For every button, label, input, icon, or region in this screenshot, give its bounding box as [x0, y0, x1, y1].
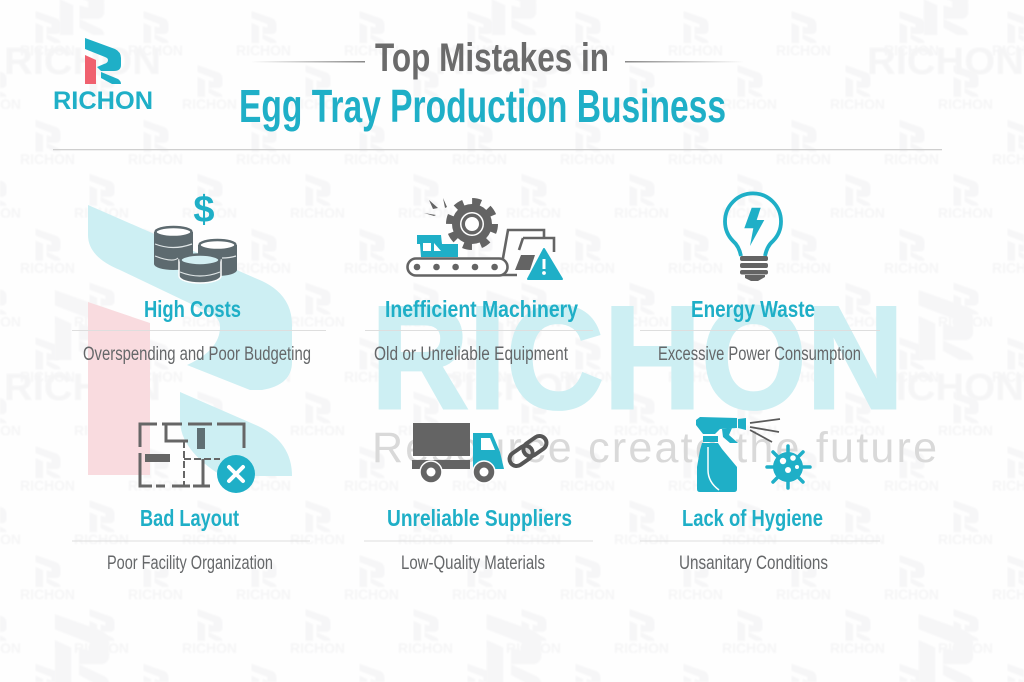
- icon: floor plan with x mark: [140, 424, 255, 493]
- company logo: RICHON: [53, 87, 153, 115]
- heading: Unreliable Suppliers: [387, 505, 572, 531]
- heading: Bad Layout: [140, 505, 239, 531]
- large watermark logo: [88, 205, 292, 476]
- title: [239, 36, 745, 132]
- description: Unsanitary Conditions: [679, 553, 828, 574]
- icon: coins and dollar: [154, 189, 237, 283]
- description: Poor Facility Organization: [107, 553, 273, 574]
- panel: unreliable suppliers: [364, 423, 593, 574]
- title: Top Mistakes in: [375, 36, 609, 80]
- background watermark tiles: RICHON: [435, 41, 592, 83]
- description: Low-Quality Materials: [401, 553, 545, 574]
- icon: light bulb: [725, 193, 781, 281]
- icon: spray bottle and virus: [696, 417, 810, 492]
- panel: high costs: [72, 189, 326, 365]
- description: Excessive Power Consumption: [658, 344, 861, 365]
- heading: Energy Waste: [691, 296, 815, 322]
- icon: coins and dollar: $: [193, 189, 215, 231]
- description: Old or Unreliable Equipment: [374, 344, 569, 365]
- panel: bad layout: [72, 424, 310, 574]
- heading: Inefficient Machinery: [385, 296, 578, 322]
- panel: inefficient machinery: [365, 198, 593, 365]
- background watermark tiles: RICHON: [4, 367, 161, 409]
- panel: energy waste: [640, 193, 880, 365]
- background watermark tiles: RICHON: [867, 41, 1024, 83]
- panel: lack of hygiene: [640, 417, 880, 574]
- background watermark tiles: RICHON: [867, 367, 1024, 409]
- company logo: [53, 38, 153, 115]
- background watermark tiles: RICHON: [435, 367, 592, 409]
- watermark slogan: Resource create the future: [372, 424, 937, 472]
- background watermark tiles: RICHON: [4, 41, 161, 83]
- heading: Lack of Hygiene: [682, 505, 823, 531]
- large watermark wordmark: RICHON: [371, 276, 904, 439]
- heading: High Costs: [144, 296, 241, 322]
- icon: truck and broken chain: [412, 423, 549, 483]
- description: Overspending and Poor Budgeting: [83, 344, 311, 365]
- icon: conveyor machine with gear and warning: [408, 198, 562, 279]
- title: Egg Tray Production Business: [239, 80, 726, 132]
